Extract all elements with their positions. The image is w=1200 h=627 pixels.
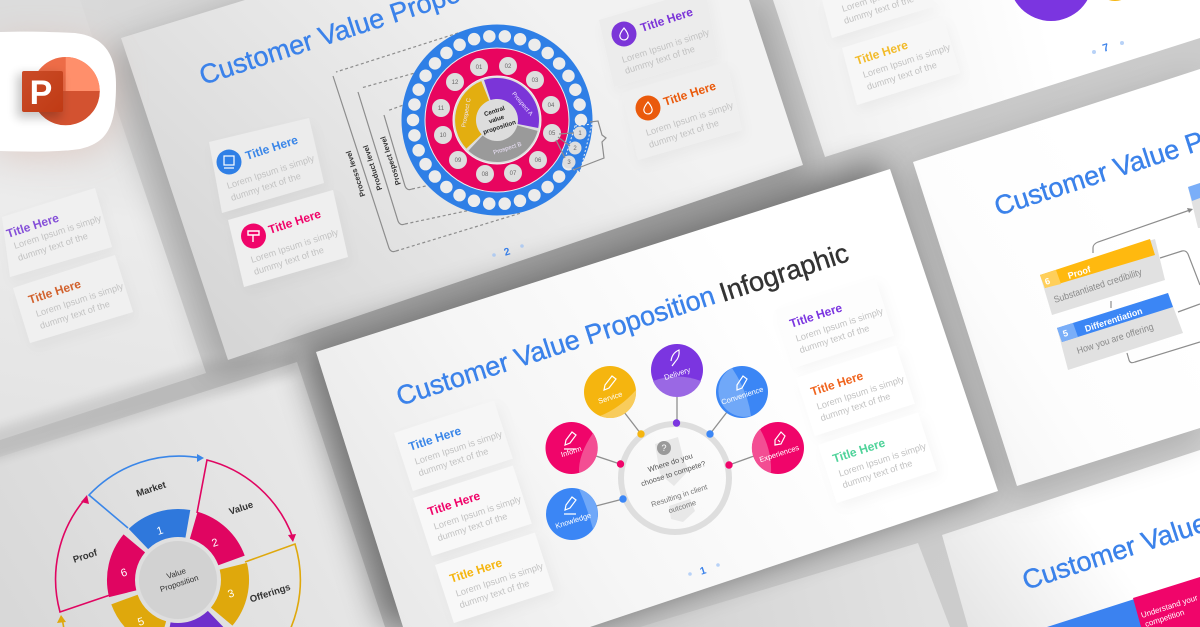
text: result: Resulting in client — [650, 482, 709, 509]
outer arrows — [56, 456, 300, 627]
numbers: 05 — [549, 131, 556, 137]
card: yellow title — [842, 17, 960, 105]
card: blue title with icon — [209, 118, 324, 213]
card: left blue: dummy text of the — [417, 446, 490, 478]
page number 2: 2 — [503, 246, 512, 259]
card: pink title with icon: dummy text of the — [253, 245, 325, 277]
node: delivery — [651, 344, 703, 397]
segment: prospect C — [455, 81, 489, 149]
numbers: 07 — [510, 171, 517, 177]
card: right purple: Lorem Ipsum is simply — [794, 306, 885, 344]
text: result: outcome — [667, 498, 697, 515]
circle: yellow — [1094, 0, 1136, 1]
wheel segment 5 — [106, 586, 175, 627]
card: purple title — [2, 188, 112, 277]
ring: inner outline — [453, 76, 541, 164]
numbers — [438, 64, 556, 178]
node: knowledge — [546, 488, 598, 540]
detail: dashed wedge with steps: 3 — [567, 160, 571, 166]
hub: value proposition: Value — [165, 566, 188, 581]
icon: question mark: ? — [661, 443, 667, 453]
wheel labels: Offerings — [248, 582, 292, 605]
card: orange title with icon: Title Here — [662, 79, 718, 109]
card: right green — [818, 413, 937, 503]
card: yellow title: dummy text of the — [866, 60, 938, 92]
wheel labels: Value — [228, 500, 255, 518]
card: left pink: Title Here — [426, 488, 482, 519]
wheel labels: Proof — [72, 547, 100, 566]
wheel numbers — [119, 524, 236, 627]
slide panel: top left partial — [0, 0, 206, 440]
card: right purple: Title Here — [788, 300, 844, 331]
shadow: band between left slides — [0, 352, 297, 470]
numbers: 04 — [548, 103, 555, 109]
hub: central text — [482, 105, 517, 136]
slide panel: right process — [913, 69, 1200, 486]
node: inform: Inform — [560, 444, 583, 459]
heading: main title: Customer Value Proposition — [393, 280, 719, 412]
hub: central text: Central — [483, 105, 506, 118]
icon: purple circle — [612, 22, 636, 46]
wheel segment 3 — [208, 557, 254, 627]
card: differentiation: How you are offering — [1076, 322, 1155, 357]
detail: dashed wedge with steps: 2 — [573, 146, 577, 152]
wheel labels: Market — [135, 479, 168, 500]
card: right orange: Lorem Ipsum is simply — [815, 374, 906, 412]
wheel numbers: 3 — [226, 587, 236, 601]
card: differentiation: 5 — [1062, 328, 1069, 339]
card: right green: dummy text of the — [841, 458, 914, 490]
wheel labels — [72, 479, 292, 605]
labels: prospects: Prospect B — [493, 142, 523, 156]
card: orange title with icon: dummy text of the — [648, 118, 720, 150]
shadow: right slide — [906, 75, 1200, 500]
icon: powerpoint pie: P — [30, 74, 52, 112]
card: purple title with icon: dummy text of the — [624, 44, 696, 76]
labels: prospects: Prospect C — [461, 97, 473, 128]
card: purple title: Title Here — [5, 211, 61, 241]
node: service: Service — [597, 389, 623, 406]
card: purple title: dummy text of the — [17, 231, 89, 263]
card: right purple: dummy text of the — [798, 323, 871, 355]
slide panel: top right, slide 7 — [773, 0, 1200, 157]
labels: levels — [344, 135, 403, 198]
shadow: slide 2 — [106, 5, 810, 375]
hub: central text: proposition — [482, 119, 517, 136]
labels: prospects — [461, 91, 533, 156]
numbers: 06 — [535, 158, 542, 164]
icon: question mark — [657, 441, 671, 455]
wheel numbers: 2 — [210, 536, 220, 550]
card: right green: Lorem Ipsum is simply — [837, 441, 928, 479]
card: pink title with icon: Title Here — [267, 207, 323, 237]
card: differentiation: Differentiation — [1084, 306, 1144, 334]
slide panel: slide 2 circular diagram — [121, 0, 803, 360]
wheel numbers: 6 — [119, 566, 129, 580]
slide panel: main slide — [316, 169, 998, 627]
card: proof: 6 — [1044, 276, 1051, 287]
heading: main title — [393, 238, 852, 412]
card: left yellow: Title Here — [448, 555, 504, 586]
card: left yellow: dummy text of the — [458, 578, 531, 610]
numbered circles — [432, 57, 561, 183]
hub ring — [621, 424, 729, 532]
wheel segment 6 — [102, 533, 148, 603]
card: right green: Title Here — [831, 435, 887, 466]
card: right orange: Title Here — [809, 368, 865, 399]
node: inform — [546, 422, 598, 474]
card: left pink: dummy text of the — [436, 511, 509, 543]
card: orange title: Lorem Ipsum is simply — [35, 281, 125, 319]
ring: blue with dots — [402, 24, 592, 216]
diagram: hub and spokes — [596, 395, 754, 532]
card: left pink: Lorem Ipsum is simply — [432, 494, 523, 532]
labels: levels: Prospect level — [378, 135, 403, 186]
arrow: upper — [655, 437, 689, 486]
numbers: 11 — [438, 106, 445, 112]
hub: value proposition — [139, 541, 217, 619]
text: question: choose to compete? — [640, 459, 707, 488]
segment: prospect B — [468, 125, 538, 162]
arrow: lower — [669, 499, 695, 522]
card: top partial — [1188, 183, 1200, 228]
page number 1: 1 — [699, 565, 708, 578]
icon: orange circle — [636, 96, 660, 120]
slide panel: bottom left wheel — [0, 362, 385, 627]
card: orange title with icon: Lorem Ipsum is simply — [645, 100, 735, 138]
numbers: 02 — [505, 64, 512, 70]
circle: purple — [1009, 0, 1093, 21]
node: convenience: Convenience — [720, 385, 764, 407]
wheel numbers: 1 — [155, 524, 165, 538]
page number 1 — [688, 563, 720, 578]
card: orange title with icon — [622, 62, 742, 160]
numbers: 09 — [455, 158, 462, 164]
labels: levels: Process level — [344, 150, 367, 198]
bracket: level outlines — [333, 33, 521, 252]
numbers: 12 — [452, 80, 459, 86]
labels: levels: Product level — [361, 144, 384, 192]
card: orange title: Title Here — [27, 277, 83, 307]
icon: blue circle — [216, 150, 242, 174]
card: left yellow: Lorem Ipsum is simply — [454, 561, 545, 599]
card: pink title with icon: Lorem Ipsum is simply — [250, 227, 340, 265]
card: proof: Substantiated credibility — [1053, 267, 1144, 306]
box: understand your competition: Understand your — [1140, 593, 1199, 620]
page number 7: 7 — [1101, 42, 1111, 55]
slide panel: bottom middle — [640, 543, 950, 627]
hub dots — [617, 419, 733, 503]
card: yellow title: Lorem Ipsum is simply — [862, 42, 952, 80]
box: blue — [1047, 578, 1200, 627]
node: experiences: Experiences — [758, 443, 800, 464]
hub: central text: value — [488, 114, 506, 125]
text: question: Where do you — [647, 451, 694, 474]
card: purple title with icon: Lorem Ipsum is simply — [621, 27, 711, 65]
segment: prospect A — [484, 78, 539, 128]
powerpoint logo badge — [0, 32, 116, 158]
card: orange title — [13, 255, 133, 343]
wheel segment 4 — [158, 607, 230, 627]
card: left blue — [394, 401, 513, 491]
ring: pink — [425, 48, 569, 192]
card: differentiation — [1057, 293, 1183, 370]
numbers: 08 — [482, 172, 489, 178]
card: left pink — [413, 466, 532, 556]
card: upper partial — [822, 0, 938, 38]
card: purple title with icon — [599, 0, 718, 87]
node: convenience — [716, 366, 768, 418]
detail: dashed wedge with steps — [556, 121, 606, 172]
diagram: concentric rings — [402, 24, 592, 216]
card: right purple — [775, 278, 894, 368]
card: blue title with icon: dummy text of the — [230, 171, 302, 203]
connector lines — [1093, 208, 1200, 363]
node: experiences — [752, 422, 804, 474]
hub: value proposition: Proposition — [159, 573, 200, 594]
card: left yellow — [435, 533, 554, 623]
labels: prospects: Prospect A — [510, 91, 533, 117]
node: delivery: Delivery — [663, 365, 692, 382]
wheel segment 1 — [126, 503, 198, 553]
card: purple title: Lorem Ipsum is simply — [13, 213, 103, 251]
card: left blue: Lorem Ipsum is simply — [413, 429, 504, 467]
node: knowledge: Knowledge — [554, 511, 592, 531]
card: yellow title: Title Here — [854, 38, 910, 68]
card: proof — [1040, 239, 1165, 315]
card: blue title with icon: Title Here — [244, 133, 300, 163]
ring dots — [413, 36, 581, 204]
card: right orange — [796, 346, 915, 436]
spokes — [596, 395, 754, 506]
detail: dashed wedge with steps: 1 — [578, 131, 582, 137]
arrow heads — [57, 454, 296, 623]
wheel segment 2 — [181, 506, 250, 574]
numbers: 10 — [440, 133, 447, 139]
card: purple title with icon: Title Here — [639, 5, 695, 35]
node: service — [584, 366, 636, 418]
numbers: 03 — [532, 78, 539, 84]
card: right orange: dummy text of the — [819, 391, 892, 423]
icon: pink circle — [241, 224, 266, 248]
card: orange title: dummy text of the — [39, 299, 111, 331]
card: pink title with icon — [228, 190, 348, 287]
numbers: 01 — [476, 65, 483, 71]
card: left blue: Title Here — [407, 423, 463, 454]
heading: main title: Infographic — [716, 238, 852, 308]
page number 7 — [1092, 41, 1124, 55]
card: proof: Proof — [1067, 264, 1093, 281]
card: blue title with icon: Lorem Ipsum is simply — [226, 153, 316, 191]
page number 2 — [492, 244, 524, 259]
slide panel: lower right — [942, 450, 1200, 627]
box: understand your competition — [1133, 577, 1200, 627]
shadow: main slide — [298, 160, 990, 627]
